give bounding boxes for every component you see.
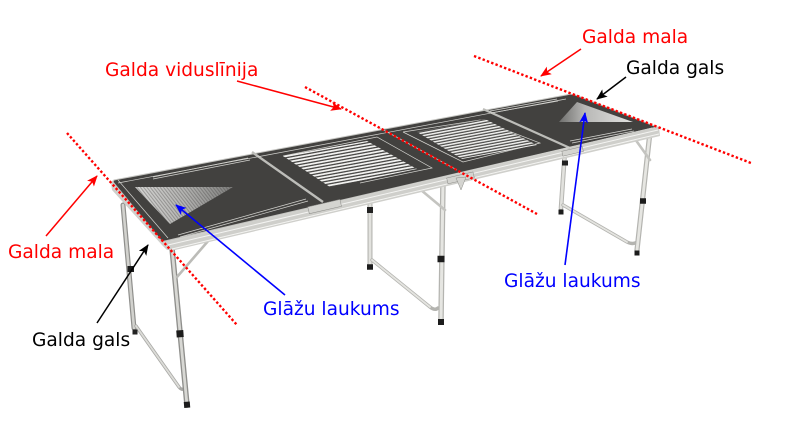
left end legs [123,205,215,405]
table top [111,94,660,250]
arrow: right glass area [565,113,585,265]
arrow: left glass area [176,205,285,295]
arrow: left end [97,245,148,323]
centre-right stripes [417,119,537,159]
hinge dividers [252,109,570,202]
frame detail lines [168,130,659,249]
left edge line [67,133,237,325]
labels [8,27,724,351]
centre line [305,87,537,214]
arrow: right edge [541,49,581,76]
glass area right triangle [559,102,633,122]
edge and centre lines [67,56,751,325]
table legs [123,132,650,405]
arrow: right end [597,77,626,99]
right end legs [558,132,650,253]
black playing surface [113,94,657,241]
label: right edge: Galda mala [582,27,688,48]
glass area left triangle [135,187,233,224]
right edge line [474,56,751,163]
hinge hardware [308,147,583,214]
arrow: left edge [46,176,97,236]
middle legs [367,180,445,322]
aluminium frame [111,127,660,250]
label: left end: Galda gals [32,330,130,351]
label: left edge: Galda mala [8,242,114,263]
label: left glass area: Glāžu laukums [263,299,400,320]
arrow: centre line [237,81,341,109]
arrows [46,49,626,323]
centre-left stripes [283,141,417,187]
label: right glass area: Glāžu laukums [504,271,641,292]
label: centre line: Galda viduslīnija [105,60,258,81]
label: right end: Galda gals [626,58,724,79]
outline markings [118,99,652,241]
